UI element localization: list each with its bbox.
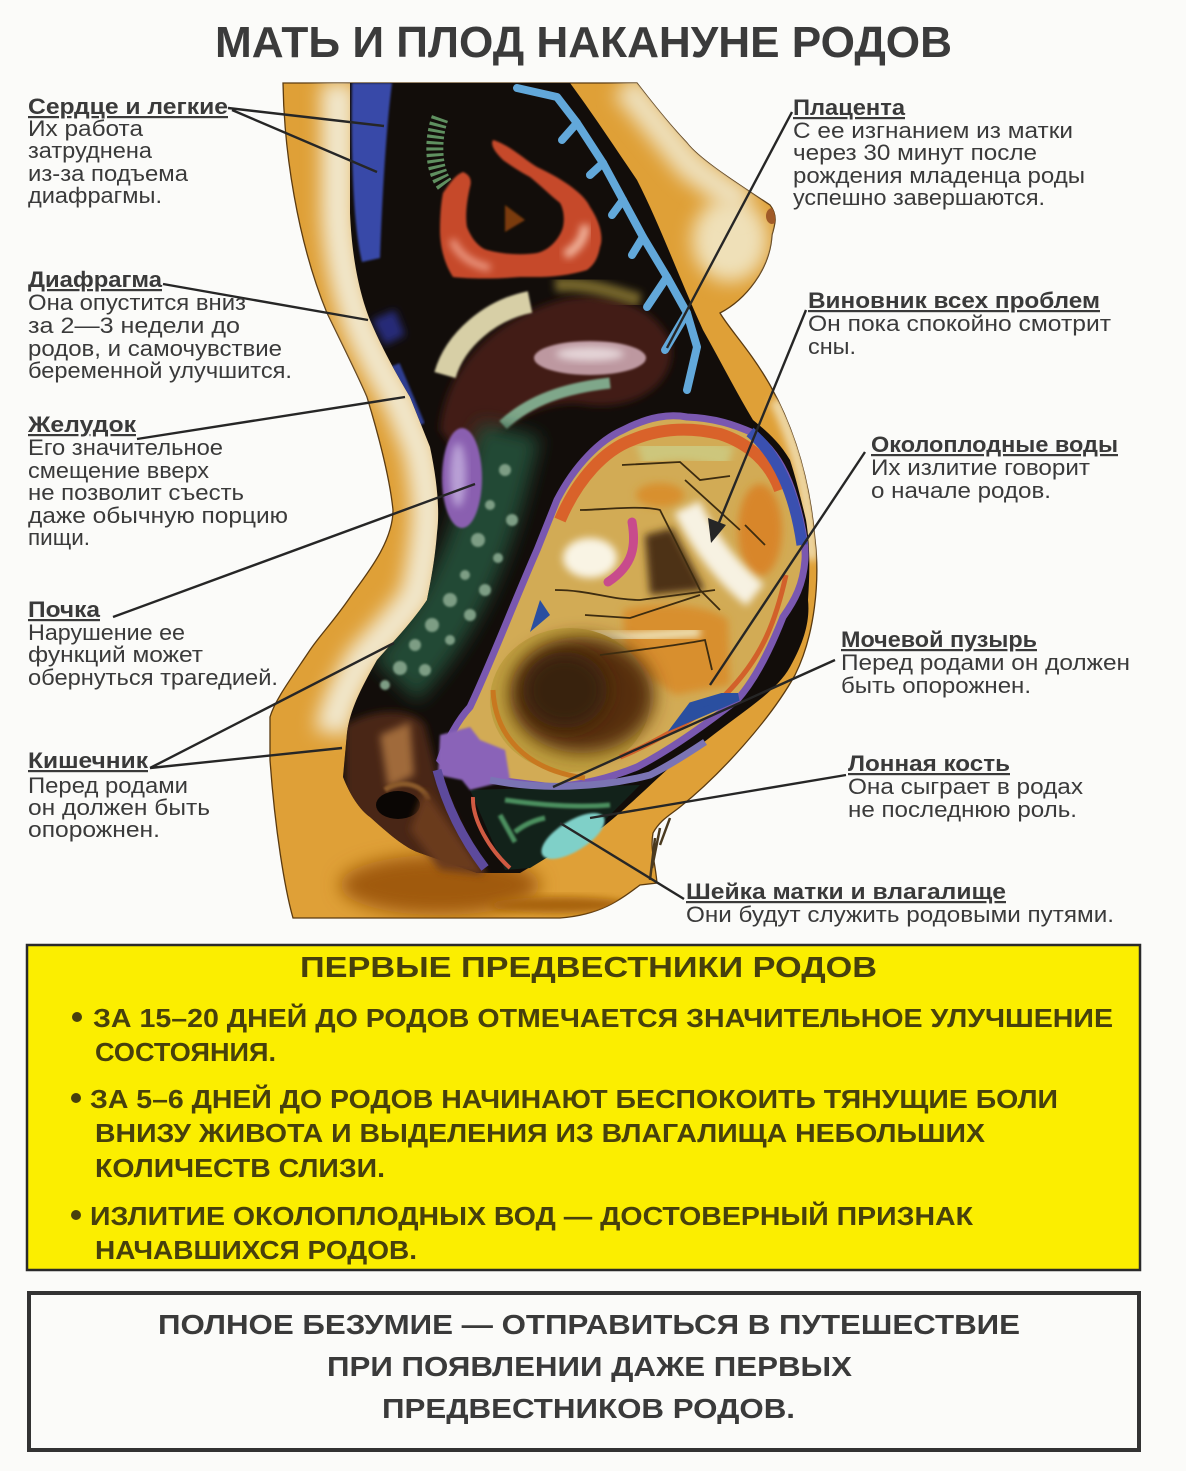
rectum — [345, 712, 490, 880]
illustration: cross-section of pregnant woman — [270, 83, 817, 918]
panel: warning — [29, 1293, 1139, 1450]
label: bladder: быть опорожнен. — [841, 673, 1031, 698]
label: intestine — [28, 748, 210, 842]
label: heart and lungs: диафрагмы. — [28, 183, 162, 208]
label: stomach: даже обычную порцию — [28, 503, 288, 528]
label: heart and lungs: затруднена — [28, 138, 153, 163]
label: cervix and vagina: Шейка матки и влагалище — [686, 879, 1006, 904]
white shoulder highlight — [563, 538, 617, 578]
label: heart and lungs: Их работа — [28, 116, 144, 141]
label: placenta: через 30 минут после — [793, 140, 1037, 165]
label: stomach — [27, 412, 288, 550]
label: amniotic fluid: о начале родов. — [871, 478, 1051, 503]
bladder — [680, 697, 738, 722]
head outline — [493, 690, 585, 778]
breast highlight — [692, 198, 768, 282]
bullet 3: ИЗЛИТИЕ ОКОЛОПЛОДНЫХ ВОД — ДОСТОВЕРНЫЙ ПРИЗНАК — [90, 1201, 973, 1231]
label: diaphragm: Она опустится вниз — [28, 290, 246, 315]
kidney highlight — [450, 443, 466, 507]
vagina wall purple — [437, 770, 485, 868]
green pelvic tissue — [470, 785, 640, 870]
blue wedge by head — [530, 600, 550, 632]
bullet 2: ЗА 5–6 ДНЕЙ ДО РОДОВ НАЧИНАЮТ БЕСПОКОИТЬ ТЯНУЩИЕ БОЛИ — [90, 1084, 1058, 1114]
uterus right blue band — [750, 432, 802, 545]
label: heart and lungs: из-за подъема — [28, 161, 189, 186]
label: cervix and vagina — [686, 879, 1114, 927]
pubic hair — [650, 818, 670, 880]
white arm highlight — [605, 490, 652, 506]
fat layer band — [332, 83, 428, 733]
warning border — [29, 1293, 1139, 1450]
label: fetus — [808, 288, 1111, 359]
label: kidney — [28, 597, 278, 690]
liver — [440, 296, 672, 470]
label: diaphragm: родов, и самочувствие — [28, 336, 282, 361]
label: pubic bone — [848, 751, 1083, 822]
label: kidney: Нарушение ее — [28, 620, 185, 645]
label: fetus: Виновник всех проблем — [808, 288, 1100, 313]
fetus legs — [623, 605, 730, 695]
buttock shadow — [340, 855, 540, 915]
label: pubic bone: Она сыграет в родах — [848, 774, 1083, 799]
orange mid back — [636, 483, 684, 507]
belly edge highlight — [775, 400, 812, 560]
label: diaphragm — [28, 267, 292, 383]
label: amniotic fluid: Их излитие говорит — [871, 455, 1090, 480]
pale green bowel stripe — [503, 383, 610, 425]
chest shadow — [645, 528, 705, 595]
nipple — [766, 208, 776, 224]
heart highlights — [565, 225, 585, 255]
label: stomach: Его значительное — [28, 435, 223, 460]
pale thigh highlight — [590, 632, 700, 637]
label: stomach: не позволит съесть — [28, 480, 244, 505]
body silhouette — [270, 83, 817, 918]
panel: first signs of labour — [27, 945, 1140, 1270]
body cavity — [343, 83, 809, 873]
bullet 2: ВНИЗУ ЖИВОТА И ВЫДЕЛЕНИЯ ИЗ ВЛАГАЛИЩА НЕБОЛЬШИХ — [95, 1118, 986, 1148]
label: stomach: пищи. — [28, 525, 90, 550]
label: cervix and vagina: Они будут служить родовыми путями. — [686, 902, 1114, 927]
label: pubic bone: не последнюю роль. — [848, 797, 1077, 822]
label: intestine: Перед родами — [28, 773, 188, 798]
label: amniotic fluid — [871, 432, 1118, 503]
title: МАТЬ И ПЛОД НАКАНУНЕ РОДОВ — [215, 18, 952, 67]
label: placenta: С ее изгнанием из матки — [793, 118, 1073, 143]
label: intestine: опорожнен. — [28, 817, 160, 842]
green tissue highlights — [500, 800, 610, 842]
breast ducts (blue) — [517, 88, 697, 390]
label: placenta: успешно завершаются. — [793, 185, 1045, 210]
heart inner triangle — [505, 205, 525, 232]
orange right side of fetus — [738, 484, 782, 576]
bullet 1 — [72, 1003, 1113, 1067]
bullet 2 — [71, 1084, 1058, 1183]
pink organ — [534, 341, 646, 375]
label: amniotic fluid: Околоплодные воды — [871, 432, 1118, 457]
label: heart and lungs — [28, 94, 228, 208]
label: placenta — [793, 95, 1085, 210]
bullet 3: НАЧАВШИХСЯ РОДОВ. — [95, 1235, 417, 1265]
big white leg highlight — [687, 507, 755, 595]
label: diaphragm: за 2—3 недели до — [28, 313, 240, 338]
warning text: ПРЕДВЕСТНИКОВ РОДОВ. — [382, 1393, 795, 1424]
label: kidney: обернуться трагедией. — [28, 665, 278, 690]
label: fetus: сны. — [808, 334, 856, 359]
lower purple blobs — [438, 727, 510, 790]
uterus wall — [440, 416, 805, 787]
label: placenta: рождения младенца роды — [793, 163, 1085, 188]
label: pubic bone: Лонная кость — [848, 751, 1010, 776]
esophagus (green) — [435, 118, 445, 185]
label: stomach: смещение вверх — [28, 458, 209, 483]
label: kidney: функций может — [28, 642, 203, 667]
warning text: ПОЛНОЕ БЕЗУМИЕ — ОТПРАВИТЬСЯ В ПУТЕШЕСТВИЕ — [158, 1309, 1020, 1340]
label: heart and lungs: Сердце и легкие — [28, 94, 228, 119]
back blue vessel — [352, 83, 392, 262]
label: diaphragm: Диафрагма — [28, 267, 163, 292]
bullet 2: КОЛИЧЕСТВ СЛИЗИ. — [95, 1153, 385, 1183]
wall orange band — [560, 430, 780, 520]
skin shading and fat layer — [332, 83, 812, 915]
label: bladder: Мочевой пузырь — [841, 627, 1037, 652]
label: intestine: Кишечник — [28, 748, 149, 773]
heart and aorta — [440, 140, 601, 278]
fetal outlines — [555, 462, 765, 670]
wall orange lower right — [620, 575, 786, 757]
brown tissue left of vagina — [410, 790, 485, 875]
arrow head — [708, 518, 726, 543]
bladder wall band — [490, 742, 705, 786]
panel heading: ПЕРВЫЕ ПРЕДВЕСТНИКИ РОДОВ — [300, 952, 877, 984]
intestines mottled — [395, 430, 510, 680]
label: placenta: Плацента — [793, 95, 906, 120]
diaphragm olive band — [555, 285, 640, 300]
leader lines and arrow — [113, 108, 865, 899]
label: intestine: он должен быть — [28, 795, 210, 820]
pale top of fetus — [640, 449, 730, 458]
upper chest highlight — [625, 85, 745, 205]
label: kidney: Почка — [28, 597, 101, 622]
fetal head — [490, 628, 650, 772]
label: bladder: Перед родами он должен — [841, 650, 1130, 675]
warning text — [158, 1309, 1020, 1424]
label: stomach: Желудок — [27, 412, 137, 437]
bullet 1: ЗА 15–20 ДНЕЙ ДО РОДОВ ОТМЕЧАЕТСЯ ЗНАЧИТЕЛЬНОЕ УЛУЧШЕНИЕ — [93, 1003, 1113, 1033]
bullet 1: СОСТОЯНИЯ. — [95, 1037, 276, 1067]
label: fetus: Он пока спокойно смотрит — [808, 311, 1111, 336]
stomach pale band — [445, 302, 530, 375]
pubic bone (cyan) — [535, 804, 611, 868]
umbilical cord — [608, 522, 634, 582]
bullet 3 — [71, 1201, 973, 1265]
warning text: ПРИ ПОЯВЛЕНИИ ДАЖЕ ПЕРВЫХ — [327, 1351, 852, 1382]
label: diaphragm: беременной улучшится. — [28, 358, 292, 383]
panel background — [27, 945, 1140, 1270]
uterus contents — [490, 430, 786, 778]
label: bladder — [841, 627, 1130, 698]
vagina red line — [473, 797, 510, 868]
kidney — [442, 428, 482, 528]
